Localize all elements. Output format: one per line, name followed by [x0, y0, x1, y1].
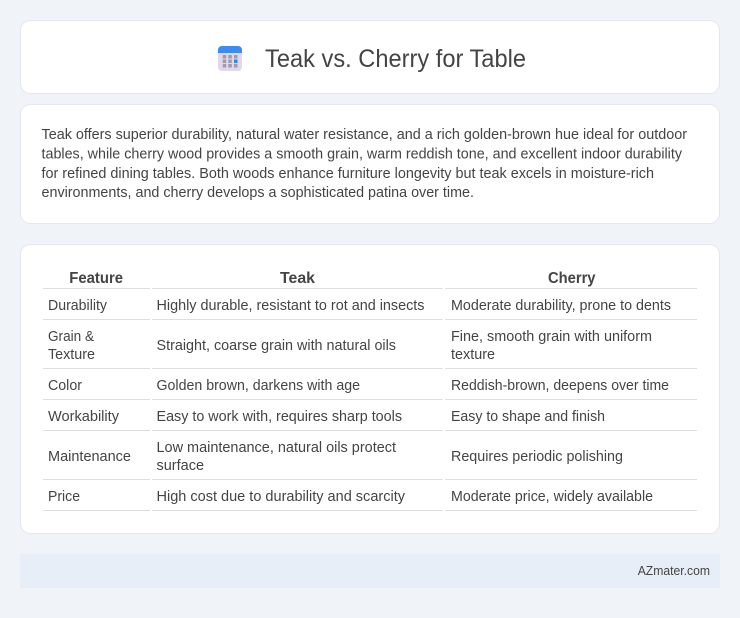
text block: summary: environments, and cherry develops a sophisticated patina over time. — [42, 185, 474, 201]
row: workability: Easy to shape and finish — [451, 409, 605, 425]
table header: Cherry — [548, 270, 596, 287]
panel: comparison table — [20, 244, 720, 534]
row: maintenance: Requires periodic polishing — [451, 449, 623, 465]
footer — [20, 554, 720, 588]
row: maintenance: Maintenance — [48, 449, 131, 465]
panel: summary — [20, 104, 720, 224]
text block: summary: for refined dining tables. Both woods enhance furniture longevity but teak excels in moisture-rich — [42, 166, 654, 182]
row: grain and texture: Texture — [48, 347, 95, 363]
text block: summary: Teak offers superior durability, natural water resistance, and a rich golden-brown hue ideal for outdoor — [42, 127, 687, 143]
footer: AZmater.com — [638, 564, 710, 578]
row: price: High cost due to durability and scarcity — [156, 489, 406, 505]
row: grain and texture: Grain & — [48, 329, 94, 345]
row: grain and texture — [48, 329, 652, 363]
icon: calendar — [218, 46, 242, 71]
table header: Feature — [69, 270, 123, 287]
row: workability — [48, 409, 605, 425]
row: color: Reddish-brown, deepens over time — [451, 378, 669, 394]
row: price — [48, 489, 653, 505]
row: workability: Workability — [48, 409, 120, 425]
row: durability: Highly durable, resistant to rot and insects — [156, 298, 424, 314]
row: maintenance: surface — [156, 458, 204, 474]
row: grain and texture: Fine, smooth grain with uniform — [451, 329, 652, 345]
row: durability: Moderate durability, prone to dents — [451, 298, 671, 314]
table header — [69, 270, 596, 287]
row: grain and texture: texture — [451, 347, 495, 363]
row: color — [48, 378, 669, 394]
row: maintenance — [48, 440, 623, 474]
row: price: Moderate price, widely available — [451, 489, 653, 505]
title: Teak vs. Cherry for Table — [265, 45, 526, 73]
text block: summary — [42, 127, 687, 201]
row: durability: Durability — [48, 298, 108, 314]
row: color: Color — [48, 378, 82, 394]
row: durability — [48, 298, 671, 314]
row: price: Price — [48, 489, 80, 505]
row: grain and texture: Straight, coarse grain with natural oils — [156, 338, 396, 354]
row: maintenance: Low maintenance, natural oils protect — [156, 440, 396, 456]
row: color: Golden brown, darkens with age — [156, 378, 360, 394]
row: workability: Easy to work with, requires sharp tools — [156, 409, 402, 425]
text block: summary: tables, while cherry wood provides a smooth grain, warm reddish tone, and excellent indoor durability — [42, 146, 683, 162]
panel: title — [20, 20, 720, 94]
table header: Teak — [280, 270, 315, 287]
